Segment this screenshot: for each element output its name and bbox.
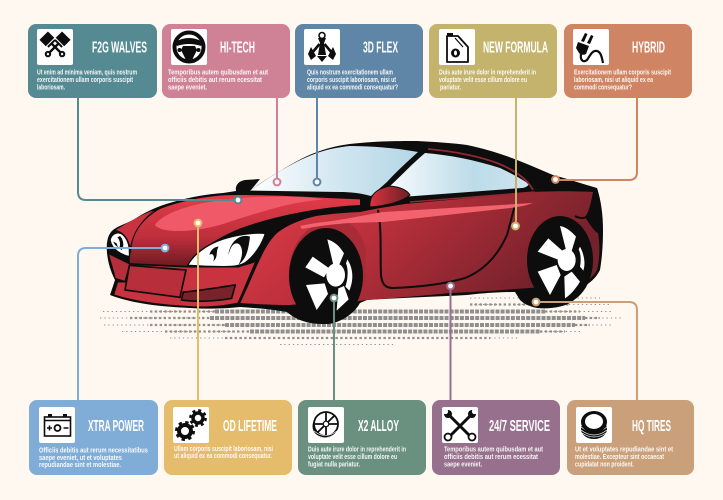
- heading: OD LIFETIME: [223, 418, 277, 435]
- panel: 24/7 Service: [432, 400, 560, 475]
- description: Temporibus autem quibusdam et aut: [444, 444, 543, 454]
- hood crease line: [131, 208, 160, 253]
- connector: HQ Tires: [533, 299, 637, 400]
- bumper side corner: [108, 253, 130, 282]
- description: [575, 444, 673, 468]
- description: cupidatat non proident.: [575, 460, 634, 468]
- rear wheel: [527, 216, 593, 304]
- halftone car shadow: [100, 298, 622, 344]
- front bumper: [113, 260, 257, 307]
- roof trim stripe: [428, 149, 533, 190]
- description: [439, 68, 536, 92]
- body highlight stripe: [300, 203, 533, 229]
- description: laboriosam, nisi ut aliquid ex ea: [574, 75, 654, 84]
- heading: XTRA POWER: [88, 418, 144, 435]
- fender edge line: [238, 209, 360, 304]
- connector: OD Lifetime: [195, 220, 201, 400]
- icon: alloy wheel: [308, 407, 344, 443]
- description: Temporibus autem quibusdam et aut: [168, 68, 268, 76]
- icon: suspension: [304, 29, 340, 65]
- description: voluptate velit esse cillum dolore eu: [439, 75, 527, 84]
- description: [307, 68, 398, 92]
- connector: New Formula: [512, 98, 519, 229]
- sill trim stripe: [410, 192, 535, 202]
- panel: New Formula: [429, 24, 557, 98]
- panel: OD Lifetime: [164, 400, 292, 475]
- heading: HYBRID: [632, 40, 665, 56]
- description: commodi consequatur?: [574, 82, 632, 92]
- description: fugiat nulla pariatur.: [308, 460, 360, 468]
- wheel arch lip: [289, 220, 366, 304]
- icon: battery: [39, 407, 75, 443]
- heading: HI-TECH: [220, 40, 255, 56]
- description: Exercitationem ullam corporis suscipit: [574, 68, 671, 76]
- heading: NEW FORMULA: [483, 40, 548, 56]
- heading: 24/7 SERVICE: [489, 418, 550, 435]
- heading: F2G WALVES: [92, 40, 147, 56]
- connector: Xtra Power: [78, 245, 168, 400]
- description: repudiandae sint et molestiae.: [39, 460, 121, 469]
- icon: electric plug: [573, 29, 609, 65]
- side window: [390, 153, 529, 197]
- icon: tire stack: [576, 407, 612, 443]
- hood: [130, 195, 360, 266]
- description: [174, 444, 273, 460]
- connector: F2G Walves: [78, 98, 241, 203]
- description: Ut enim ad minima veniam, quis nostrum: [37, 68, 137, 76]
- description: [168, 68, 268, 92]
- description: saepe eveniet, ut et voluptates: [39, 453, 122, 462]
- panel: 3D Flex: [295, 24, 423, 98]
- far headlight: [110, 233, 129, 257]
- lower air intake: [181, 285, 235, 301]
- panel: Hi-Tech: [162, 24, 290, 98]
- connector: Hybrid: [552, 98, 637, 183]
- description: saepe eveniet.: [168, 82, 207, 92]
- connector: X2 Alloy: [331, 295, 337, 400]
- windshield: [250, 146, 418, 196]
- grille plate: [125, 265, 186, 297]
- description: Ut et voluptates repudiandae sint et: [575, 444, 673, 454]
- car silhouette: [107, 141, 603, 324]
- description: Quis nostrum exercitationem ullam: [307, 68, 393, 76]
- description: aliquid ex ea commodi consequatur?: [307, 82, 398, 92]
- panel: Hybrid: [564, 24, 692, 98]
- heading: HQ TIRES: [632, 418, 671, 435]
- door outline: [378, 205, 515, 288]
- description: exercitationem ullam corporis suscipit: [37, 75, 133, 84]
- side body panel: [240, 191, 599, 305]
- heading: X2 ALLOY: [358, 418, 399, 435]
- description: saepe eveniet.: [444, 460, 482, 468]
- description: [308, 444, 406, 468]
- illustration: red sports car: [107, 141, 603, 324]
- panel: HQ Tires: [567, 400, 694, 475]
- description: [37, 68, 137, 92]
- rear fender fold: [575, 190, 597, 218]
- panel: F2G Walves: [28, 24, 157, 98]
- description: Duis aute irure dolor in reprehenderit in: [439, 68, 536, 76]
- connector: Hi-Tech: [274, 98, 280, 185]
- description: officiis debitis aut rerum ecessitat: [168, 75, 262, 84]
- panel: Xtra Power: [29, 400, 158, 475]
- far side hood sliver: [116, 211, 153, 247]
- description: officiis debitis aut rerum ecessitat: [444, 452, 538, 461]
- headlight: [188, 233, 265, 267]
- description: [444, 444, 543, 468]
- description: [574, 68, 671, 92]
- description: Officiis debitis aut rerum necessitatibus: [39, 446, 148, 454]
- description: laboriosam.: [37, 82, 65, 92]
- description: corporis suscipit laboriosam, nisi ut: [307, 75, 396, 84]
- description: Duis aute irure dolor in reprehenderit in: [308, 444, 406, 454]
- description: voluptate velit esse cillum dolore eu: [308, 452, 397, 461]
- description: ut aliquid ex ea commodi consequatur.: [174, 451, 272, 460]
- front wheel: [289, 228, 363, 324]
- description: Ullam corporis suscipit laboriosam, nisi: [174, 444, 273, 453]
- connector: 24/7 Service: [447, 283, 454, 400]
- description: pariatur.: [440, 82, 461, 92]
- hood highlight: [155, 197, 323, 231]
- icon: gears: [173, 407, 209, 443]
- connector: 3D Flex: [314, 98, 320, 185]
- icon: crossed pistons: [37, 29, 73, 65]
- panel: X2 Alloy: [298, 400, 426, 475]
- icon: oil jug: [439, 29, 475, 65]
- icon: crossed wrenches: [442, 407, 478, 443]
- description: molestiae. Excepteur sint occaecat: [575, 452, 664, 461]
- icon: steering wheel: [171, 29, 207, 65]
- side mirror: [370, 186, 410, 207]
- heading: 3D FLEX: [363, 40, 398, 56]
- description: [39, 446, 148, 469]
